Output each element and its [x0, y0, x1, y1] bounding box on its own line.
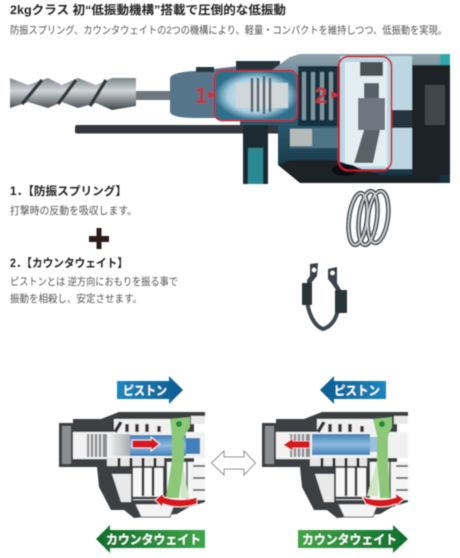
piston — [108, 434, 130, 456]
double arrow — [212, 451, 256, 475]
tool cutaway photo — [10, 54, 450, 184]
label 2: 2 — [315, 83, 327, 108]
counterweight arrow label: カウンタウェイト — [302, 533, 397, 547]
piston arrow label: ピストン — [123, 384, 167, 398]
grip — [278, 160, 440, 183]
red swing arrow — [362, 493, 404, 507]
icon: counterweight — [302, 263, 347, 329]
text 2 — [10, 275, 178, 305]
text 2: ピストンとは 逆方向におもりを振る事で — [10, 275, 178, 288]
chuck — [170, 66, 240, 118]
right diagram — [262, 376, 408, 553]
counterweight part in frame — [360, 62, 383, 76]
red frame 2 — [338, 56, 392, 170]
side handle rod — [75, 125, 285, 134]
chamber — [340, 56, 412, 169]
plus sign — [89, 228, 109, 249]
main body — [240, 54, 450, 183]
heading 2: 2．【カウンタウェイト】 — [10, 257, 128, 270]
counterweight arrow label: カウンタウェイト — [106, 533, 201, 547]
text 1: 打撃時の反動を吸収します。 — [10, 204, 137, 217]
drill bit — [10, 78, 136, 110]
cutaway drawing — [262, 412, 408, 518]
highlight 1 contents — [215, 71, 298, 120]
red piston arrow — [283, 438, 310, 451]
red frame 1 — [214, 70, 298, 120]
icon: spring — [346, 190, 391, 246]
red swing arrow — [155, 494, 197, 507]
counterweight arrow label — [96, 525, 205, 553]
counterweight arrow label — [298, 525, 408, 553]
left diagram — [59, 376, 205, 553]
shank — [135, 91, 175, 100]
lower gear — [290, 128, 338, 148]
piston arrow label — [320, 376, 386, 404]
cutaway drawing — [59, 412, 205, 518]
red piston arrow — [132, 437, 160, 451]
piston — [312, 434, 370, 455]
text 2: 振動を相殺し、安定させます。 — [10, 292, 142, 305]
green counterweight lever — [367, 458, 378, 496]
green counterweight lever — [181, 454, 189, 498]
title: 2kgクラス 初“低振動機構”搭載で圧倒的な低振動 — [10, 2, 286, 17]
piston arrow label — [117, 376, 183, 404]
piston arrow label: ピストン — [334, 384, 380, 398]
spring section — [298, 66, 340, 126]
heading 1: 1．【防振スプリング】 — [10, 184, 127, 198]
label 1: 1 — [195, 83, 207, 108]
handle column — [243, 120, 268, 184]
